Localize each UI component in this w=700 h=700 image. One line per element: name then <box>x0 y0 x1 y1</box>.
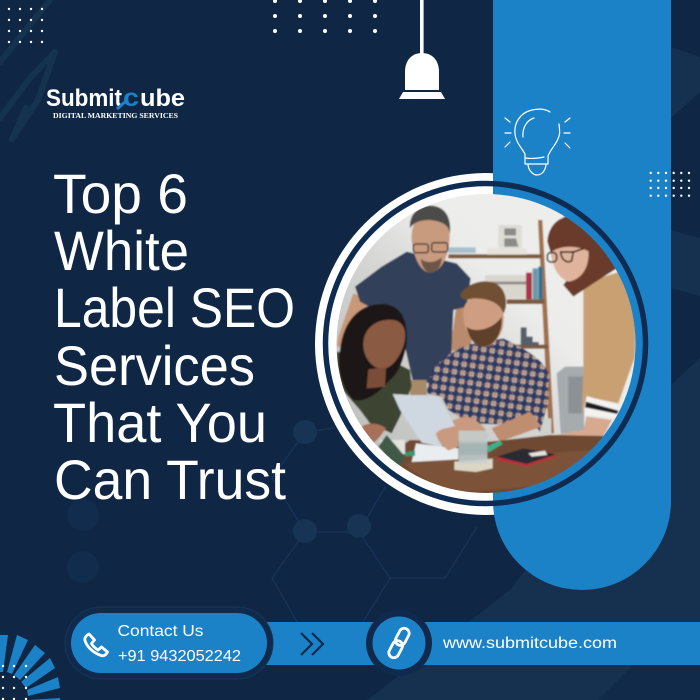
title: Top 6 <box>53 162 188 225</box>
icon: hanging lamp <box>399 0 445 99</box>
shelving unit <box>448 220 554 434</box>
website address: www.submitcube.com <box>442 635 617 652</box>
title: Services <box>54 334 255 397</box>
title: Label SEO <box>54 276 295 339</box>
outer white ring <box>315 173 657 515</box>
title <box>53 162 295 511</box>
icon: phone <box>85 634 108 656</box>
title: That You <box>53 391 267 454</box>
icon: light bulb <box>505 109 570 175</box>
dot grid: top left <box>8 8 43 43</box>
background hexagon network <box>67 420 477 622</box>
background panel shapes <box>367 47 700 700</box>
contact pill: Contact Us <box>118 623 204 640</box>
logo: Submitcube: Submit <box>46 85 122 112</box>
logo: Submitcube <box>46 84 185 120</box>
woman right <box>545 216 637 448</box>
glass on coaster <box>454 431 493 472</box>
bottom blue band <box>250 622 700 665</box>
table <box>390 434 604 493</box>
icon: chain link <box>387 627 411 659</box>
title: White <box>54 219 189 282</box>
dot grid: right <box>650 172 690 197</box>
notebook <box>497 448 556 467</box>
title: Can Trust <box>54 448 286 511</box>
decorative sunburst <box>0 635 60 700</box>
dark circle ring <box>326 184 646 504</box>
seated man <box>427 281 549 450</box>
hand over tablet <box>436 428 458 451</box>
contact pill: +91 9432052242 <box>118 648 241 665</box>
grey machine <box>557 367 584 433</box>
photo: team around a tablet <box>336 194 636 493</box>
contact pill <box>65 607 273 679</box>
blue rounded column <box>493 0 671 590</box>
logo: Submitcube: DIGITAL MARKETING SERVICES <box>53 111 178 120</box>
dot grid: top centre <box>273 0 377 33</box>
wall <box>336 194 636 450</box>
paper and pen <box>405 441 503 462</box>
link badge <box>366 610 432 676</box>
icon: double chevron <box>301 633 323 655</box>
woman left <box>337 304 412 443</box>
logo: Submitcube: ube <box>140 85 185 112</box>
background scribble <box>0 0 55 139</box>
plant and tray <box>378 435 405 467</box>
logo: Submitcube: c <box>123 84 139 112</box>
tablet <box>393 394 455 447</box>
standing man <box>337 206 472 395</box>
